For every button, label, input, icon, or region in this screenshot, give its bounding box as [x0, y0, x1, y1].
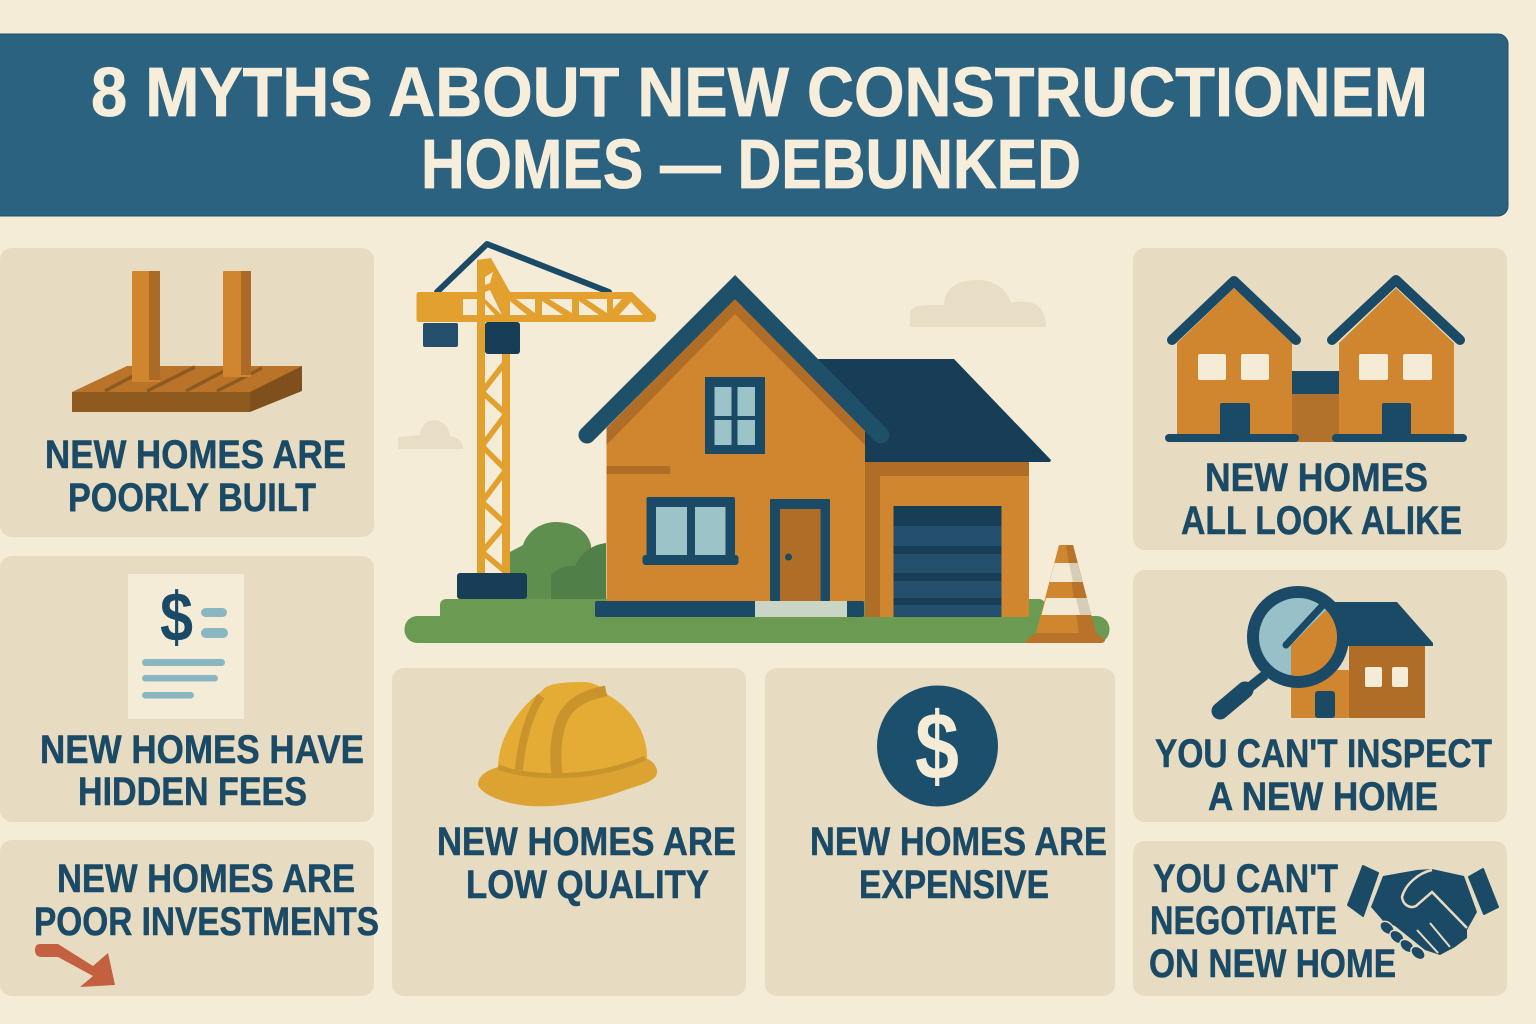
label: cannot inspect: [1155, 732, 1492, 819]
label: hidden fees: NEW HOMES HAVE: [40, 728, 364, 772]
foundation and step: [595, 601, 864, 617]
upper window: [705, 377, 765, 454]
panel: poor investments: [0, 840, 379, 996]
panel: cannot negotiate: [1133, 841, 1507, 996]
label: hidden fees: [40, 728, 364, 814]
panel: hidden fees: [0, 556, 374, 822]
illustration: traffic cone: [1025, 545, 1105, 643]
title banner: [0, 34, 1508, 216]
icon: background clouds: [398, 280, 1046, 449]
icon: magnifier over house: [1220, 592, 1433, 718]
label: all look alike: ALL LOOK ALIKE: [1181, 499, 1462, 543]
lower window: [642, 497, 738, 565]
label: poor investments: POOR INVESTMENTS: [34, 900, 379, 944]
label: cannot negotiate: [1149, 857, 1396, 986]
illustration: house: [587, 287, 1051, 617]
illustration: ground: [404, 599, 1110, 643]
title banner: 8 MYTHS ABOUT NEW CONSTRUCTIONEM: [91, 53, 1428, 131]
label: all look alike: [1181, 456, 1462, 543]
icon: invoice with dollar sign: [128, 574, 244, 719]
label: cannot negotiate: NEGOTIATE: [1150, 899, 1337, 943]
label: poorly built: [45, 433, 346, 520]
main gable roof: [587, 287, 881, 435]
front door: [770, 499, 830, 601]
icon: invoice with dollar sign: $: [160, 578, 193, 656]
panel: cannot inspect: [1133, 570, 1507, 822]
icon: hard hat: [478, 682, 657, 806]
label: low quality: [437, 820, 736, 907]
label: all look alike: NEW HOMES: [1205, 456, 1428, 500]
panel: expensive: [765, 668, 1115, 996]
label: poor investments: NEW HOMES ARE: [57, 857, 355, 901]
label: poorly built: NEW HOMES ARE: [45, 433, 346, 477]
label: expensive: EXPENSIVE: [859, 863, 1049, 907]
label: low quality: NEW HOMES ARE: [437, 820, 736, 864]
title banner: HOMES — DEBUNKED: [421, 125, 1081, 203]
label: cannot inspect: A NEW HOME: [1208, 775, 1438, 819]
illustration: bushes: [510, 522, 606, 600]
icon: wood framing: [72, 271, 302, 412]
panel: all look alike: [1133, 248, 1507, 550]
panel: poorly built: [0, 248, 374, 537]
label: cannot negotiate: YOU CAN'T: [1153, 857, 1338, 901]
label: hidden fees: HIDDEN FEES: [78, 770, 307, 814]
icon: dollar coin: [877, 686, 998, 806]
label: poor investments: [34, 857, 379, 944]
icon: declining arrow: [35, 944, 115, 987]
panel: low quality: [392, 668, 746, 996]
label: expensive: NEW HOMES ARE: [810, 820, 1107, 864]
label: low quality: LOW QUALITY: [466, 863, 709, 907]
main gable wall: [606, 298, 865, 601]
garage wing: [818, 359, 1051, 617]
icon: handshake: [1348, 866, 1498, 962]
label: expensive: [810, 820, 1107, 907]
label: poorly built: POORLY BUILT: [68, 476, 316, 520]
illustration: tower crane: [416, 244, 656, 599]
icon: two identical houses: [1165, 280, 1467, 442]
icon: dollar coin: $: [915, 693, 959, 800]
label: cannot negotiate: ON NEW HOME: [1149, 942, 1396, 986]
